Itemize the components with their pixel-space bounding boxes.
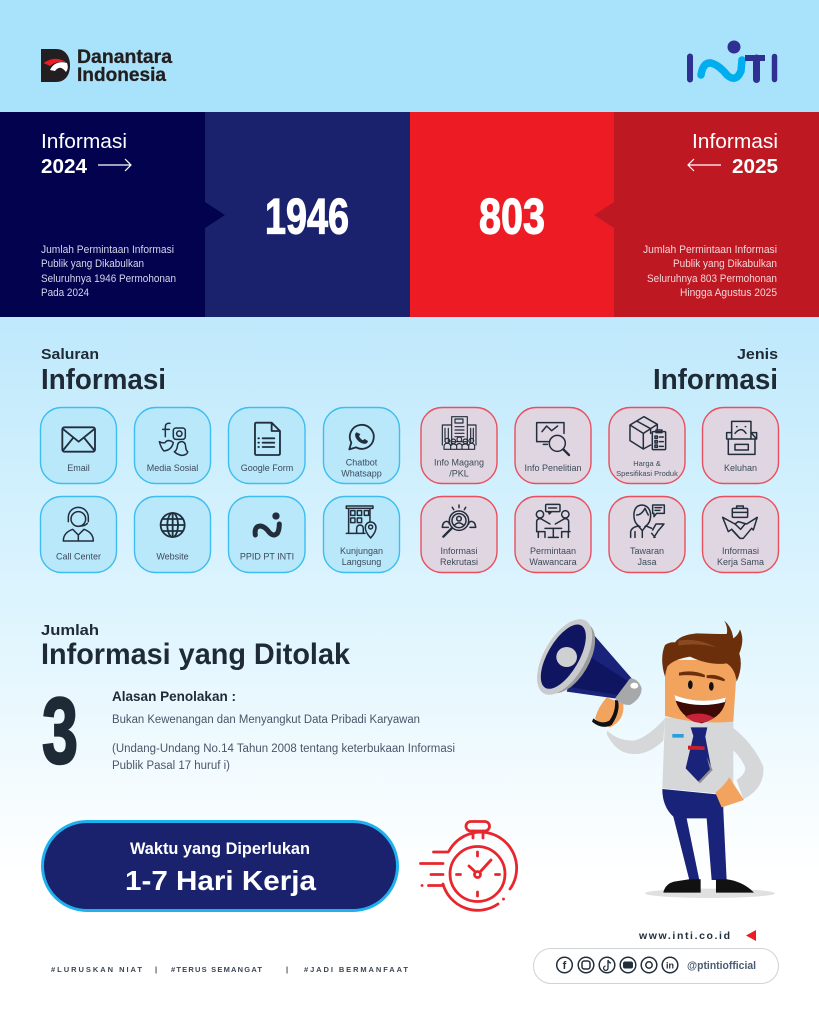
card: Media Sosial: Media Sosial [147,463,198,473]
callout: waktu yang diperlukan: 1-7 Hari Kerja [125,865,316,896]
card: Media Sosial [134,408,210,484]
text: description 2025: Jumlah Permintaan Informasi [643,244,777,256]
card: Keluhan [702,408,778,484]
card: Harga & Spesifikasi Produk [609,408,685,484]
pants [662,789,727,880]
heading: Saluran Informasi [41,346,166,396]
text: description 2024: Seluruhnya 1946 Permohonan [41,273,176,285]
callout: waktu yang diperlukan [42,822,398,910]
card: Info Magang: /PKL [449,468,469,478]
card: Chatbot Whatsapp [324,408,400,484]
card: Info Magang: Info Magang [434,458,484,468]
text: alasan penolakan: (Undang-Undang No.14 Tahun 2008 tentang keterbukaan Informasi [112,743,455,755]
text: description 2024 [41,244,176,299]
illustration: man with megaphone [526,610,775,898]
heading: Jumlah Informasi yang Ditolak: Jumlah [41,622,99,639]
card: Chatbot Whatsapp: Whatsapp [341,468,382,478]
logo: Danantara Indonesia [41,46,172,86]
panel: informasi 2024: 2024 [41,156,88,178]
card: Kunjungan Langsung: Kunjungan [340,546,383,556]
icons: social networks: f [563,960,567,972]
text: description 2024: Pada 2024 [41,287,89,299]
callout: waktu yang diperlukan: Waktu yang Diperlukan [130,840,310,858]
card: Informasi Rekrutasi [421,496,497,572]
text: description 2025: Publik yang Dikabulkan [673,258,777,270]
heading: Jenis Informasi: Jenis [737,346,778,363]
card: Call Center: Call Center [56,552,101,562]
card: Permintaan Wawancara: Permintaan [530,546,576,556]
text: footer hashtags: #TERUS SEMANGAT [171,965,262,974]
text: alasan penolakan [112,688,455,772]
card: Kunjungan Langsung [324,496,400,572]
heading: Jumlah Informasi yang Ditolak: Informasi yang Ditolak [41,638,350,671]
hair [662,621,742,682]
icons: social networks [557,957,678,973]
arm and shirt [607,718,665,754]
card: Info Magang [421,408,497,484]
card: Info Penelitian: Info Penelitian [524,463,582,473]
card: Permintaan Wawancara: Wawancara [529,557,577,567]
panel: saluran informasi cards [40,408,400,572]
head [665,660,737,723]
text: footer hashtags: | [155,965,157,974]
card: Informasi Kerja Sama: Kerja Sama [717,557,764,567]
number: 803: 803 [479,188,545,244]
face [679,671,725,681]
text: footer hashtags: #LURUSKAN NIAT [51,965,142,974]
number: 3: 3 [42,678,78,783]
card: Google Form: Google Form [241,463,293,473]
number: 1946: 1946 [265,188,349,244]
card: Harga & Spesifikasi Produk: Spesifikasi Produk [616,469,678,478]
logo: INTI [690,40,774,80]
text: website: www.inti.co.id [638,930,730,942]
card: Tawaran Jasa: Tawaran [630,546,664,556]
heading: Jenis Informasi [653,346,778,396]
text: alasan penolakan: Bukan Kewenangan dan Menyangkut Data Pribadi Karyawan [112,714,420,726]
panel: informasi 2024 [0,112,410,317]
heading: Saluran Informasi: Informasi [41,364,166,396]
text: description 2025: Hingga Agustus 2025 [680,287,777,299]
panel: informasi 2025: 2025 [732,156,778,178]
logo: Danantara Indonesia: Indonesia [77,64,166,86]
logo: Danantara Indonesia: Danantara [77,46,172,68]
heading: Informasi 2024: Informasi [41,131,127,153]
heading: Jumlah Informasi yang Ditolak [41,622,350,671]
text: description 2024: Publik yang Dikabulkan [41,258,144,270]
card: PPID PT INTI: PPID PT INTI [240,552,294,562]
text: description 2024: Jumlah Permintaan Informasi [41,244,174,256]
card: Info Penelitian [515,408,591,484]
card: Chatbot Whatsapp: Chatbot [346,458,378,468]
card: Kunjungan Langsung: Langsung [342,557,381,567]
hand [595,697,623,727]
card: Tawaran Jasa: Jasa [637,557,657,567]
text: alasan penolakan: Alasan Penolakan : [112,688,236,704]
card: Keluhan: Keluhan [724,463,757,473]
heading: Informasi 2025: Informasi [692,131,778,153]
panel: informasi 2025 [410,112,819,317]
shoes [663,879,701,893]
social media pill [534,948,778,984]
card: Website: Website [156,552,189,562]
text: alasan penolakan: Publik Pasal 17 huruf i) [112,760,230,772]
text: footer hashtags: | [286,965,288,974]
icon: stopwatch [420,822,517,910]
card: Informasi Kerja Sama [702,496,778,572]
social media pill: @ptintiofficial [687,960,756,972]
card: Informasi Rekrutasi: Informasi [440,546,478,556]
icons: social networks: in [666,960,674,970]
text: footer hashtags: #JADI BERMANFAAT [304,965,408,974]
megaphone [567,627,632,699]
card: Permintaan Wawancara [515,496,591,572]
heading: Saluran Informasi: Saluran [41,346,99,363]
tie and badge [686,727,712,782]
card: Call Center [40,496,116,572]
card: Harga & Spesifikasi Produk: Harga & [633,459,661,468]
text: description 2025 [643,244,777,299]
card: Informasi Rekrutasi: Rekrutasi [440,557,478,567]
text: footer hashtags [51,965,408,974]
panel: jenis informasi cards [421,408,778,572]
heading: Jenis Informasi: Informasi [653,364,778,396]
header band [0,0,819,112]
text: description 2025: Seluruhnya 803 Permohonan [647,273,777,285]
card: Email: Email [67,463,90,473]
card: Google Form [228,408,305,484]
card: Informasi Kerja Sama: Informasi [722,546,759,556]
card: Tawaran Jasa [609,496,685,572]
card: Website [134,496,210,572]
card: Email [40,408,116,484]
card: PPID PT INTI [228,496,305,572]
